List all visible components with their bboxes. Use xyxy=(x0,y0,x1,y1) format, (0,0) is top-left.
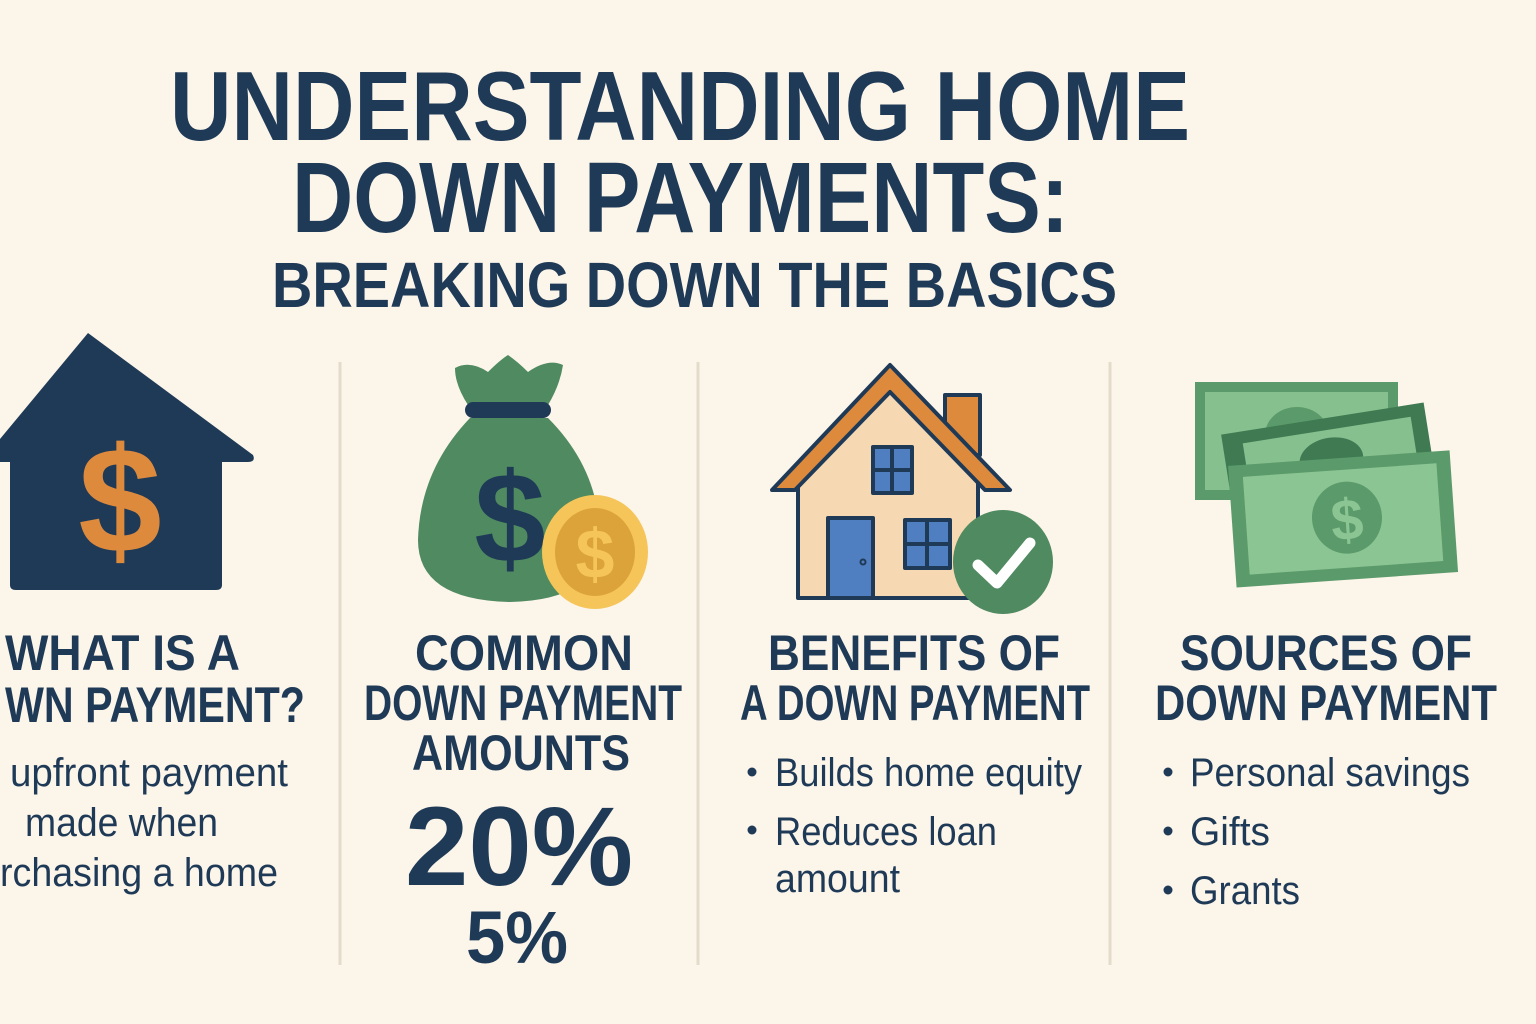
icon: coin xyxy=(542,495,648,609)
icon: cash bills xyxy=(1195,382,1458,588)
title xyxy=(170,51,1190,321)
icon: house with dollar xyxy=(0,333,254,590)
icon: house with dollar: $ xyxy=(78,416,162,584)
heading: SOURCES OF xyxy=(1180,625,1472,681)
icon: money bag: $ xyxy=(576,515,614,593)
panel: common amounts xyxy=(364,355,682,979)
stat: 20%: 20% xyxy=(405,784,633,909)
icon: money bag: $ xyxy=(474,447,546,590)
title: DOWN PAYMENTS: xyxy=(292,142,1069,254)
text block: upfront payment xyxy=(10,751,288,795)
text block: rchasing a home xyxy=(0,851,278,895)
panel: benefits xyxy=(740,365,1090,901)
heading xyxy=(5,625,305,733)
bullet list: Builds home equity xyxy=(775,751,1082,795)
icon: money bag xyxy=(418,355,648,609)
bullet list: Grants xyxy=(1190,869,1300,913)
bullet list xyxy=(1164,751,1470,913)
heading xyxy=(1155,625,1497,731)
heading: WHAT IS A xyxy=(5,625,240,681)
title: UNDERSTANDING HOME xyxy=(170,51,1190,161)
bullet list: Personal savings xyxy=(1190,751,1470,795)
bullet list: Gifts xyxy=(1190,810,1270,854)
bullet list xyxy=(748,751,1082,901)
text block xyxy=(0,751,288,895)
icon: house with check xyxy=(772,365,1010,598)
heading: COMMON xyxy=(415,625,633,681)
bullet list: Reduces loan xyxy=(775,810,997,854)
subtitle: BREAKING DOWN THE BASICS xyxy=(272,249,1117,321)
heading: AMOUNTS xyxy=(412,725,630,781)
text block: made when xyxy=(25,801,218,845)
heading xyxy=(364,625,682,781)
heading xyxy=(740,625,1090,731)
panel: sources xyxy=(1155,382,1497,913)
panel: what is a down payment xyxy=(0,333,305,895)
icon: checkmark badge xyxy=(953,510,1053,614)
icon: cash bills: $ xyxy=(1329,487,1366,554)
heading: DOWN PAYMENT xyxy=(364,675,682,731)
bullet list: amount xyxy=(775,857,900,901)
heading: BENEFITS OF xyxy=(768,625,1060,681)
heading: WN PAYMENT? xyxy=(5,677,305,733)
stat: 5%: 5% xyxy=(466,896,568,979)
heading: A DOWN PAYMENT xyxy=(740,675,1090,731)
